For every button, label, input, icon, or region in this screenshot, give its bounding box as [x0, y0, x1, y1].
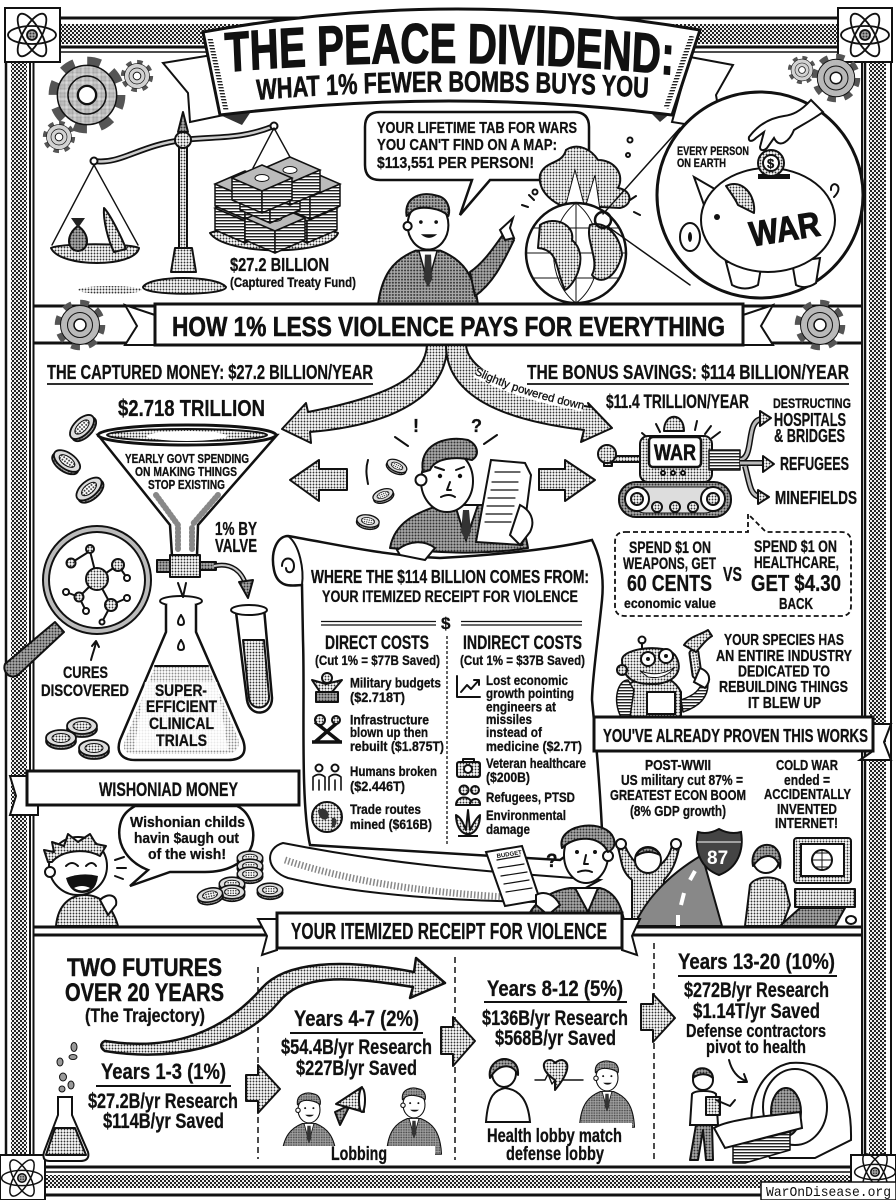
valve label — [215, 519, 257, 556]
worried man reading receipt — [366, 416, 532, 560]
coin dropping in: $ — [767, 156, 775, 171]
column: direct costs: (Cut 1% = $77B Saved) — [315, 652, 440, 668]
item: lost growth — [457, 672, 582, 754]
money label — [230, 255, 356, 290]
timeline stage: years 8-12 — [482, 976, 634, 1165]
pointer lines to inset — [603, 128, 690, 285]
piggy bank — [680, 168, 838, 288]
coin pile — [196, 851, 283, 907]
column: direct costs: DIRECT COSTS — [325, 633, 429, 654]
title banner — [161, 8, 734, 125]
money label: $27.2 BILLION — [230, 255, 329, 275]
timeline stage: years 4-7 — [280, 1006, 442, 1165]
robot statement: REBUILDING THINGS — [719, 679, 848, 696]
healthcare side: BACK — [779, 596, 813, 613]
heading: two futures: OVER 20 YEARS — [65, 979, 224, 1007]
exploding globe — [522, 138, 640, 303]
receipt held — [476, 460, 532, 545]
piggy bank: WAR — [747, 205, 823, 254]
post-wwii block — [610, 758, 746, 820]
speech bubble: wishonian childs — [119, 806, 253, 886]
test tube — [231, 605, 272, 713]
robot statement: IT BLEW UP — [748, 695, 821, 712]
hand — [749, 100, 823, 150]
funnel label: STOP EXISTING — [148, 477, 225, 492]
every person label: EVERY PERSON — [677, 144, 749, 158]
post-wwii block: GREATEST ECON BOOM — [610, 788, 746, 804]
figure: 2.718 trillion: $2.718 TRILLION — [118, 395, 265, 421]
timeline stage: years 8-12: $568B/yr Saved — [495, 1027, 616, 1050]
cures discovered label: DISCOVERED — [41, 681, 129, 700]
main title: THE PEACE DIVIDEND: — [224, 23, 672, 76]
cheering man — [616, 839, 681, 926]
item: lost growth: instead of — [486, 724, 542, 740]
scroll bottom roll — [270, 843, 600, 902]
gears top right — [790, 57, 857, 99]
arrow: bonus savings right — [445, 346, 613, 443]
item: lost growth: engineers at — [486, 698, 556, 714]
highway with 87 shield — [634, 829, 742, 926]
coin dropping in — [758, 150, 784, 176]
small receipt: BUDGET — [496, 850, 523, 860]
item: lost growth: Lost economic — [486, 672, 568, 688]
swooping trajectory arrow — [101, 958, 445, 1055]
cures discovered label — [41, 641, 129, 700]
item: veteran healthcare — [457, 755, 586, 785]
flying coins near man — [355, 456, 409, 531]
speech bubble: lifetime tab: YOUR LIFETIME TAB FOR WARS — [377, 120, 577, 137]
heading: two futures: TWO FUTURES — [67, 954, 222, 982]
MRI scanner — [714, 1063, 851, 1163]
item: military budgets — [312, 673, 441, 705]
heading: two futures: (The Trajectory) — [85, 1006, 205, 1027]
funnel label — [125, 451, 249, 492]
banner: wishoniad money: WISHONIAD MONEY — [99, 780, 238, 801]
healthcare side: HEALTHCARE, — [754, 553, 839, 572]
banner: itemized receipt for violence — [258, 913, 640, 955]
weapons side: WEAPONS, GET — [623, 554, 716, 573]
corner atom bottom right — [851, 1151, 896, 1200]
destruction labels — [773, 395, 857, 508]
weapons side: economic value — [624, 595, 716, 611]
post-wwii block: POST-WWII — [645, 758, 711, 774]
flask of clinical trials — [119, 583, 245, 760]
technician — [690, 1068, 735, 1160]
every person label — [677, 144, 749, 170]
timeline stage: years 4-7: Years 4-7 (2%) — [294, 1006, 419, 1031]
timeline stage: years 13-20: Years 13-20 (10%) — [678, 949, 835, 974]
timeline dividers — [258, 943, 654, 1160]
corner atom bottom left — [0, 1155, 45, 1200]
timeline stage: years 13-20: pivot to health — [706, 1037, 806, 1057]
weapons side: 60 CENTS — [627, 570, 712, 596]
heading: two futures — [65, 954, 224, 1027]
healthcare side: SPEND $1 ON — [754, 537, 837, 556]
item: veteran healthcare: ($200B) — [486, 769, 530, 785]
item: refugees — [456, 786, 575, 805]
timeline stage: years 4-7: Lobbing — [331, 1144, 387, 1165]
flask label: TRIALS — [156, 731, 207, 750]
scroll receipt — [270, 536, 603, 902]
item: lost growth: medicine ($2.7T) — [486, 738, 582, 754]
presenter pointing at globe — [377, 194, 514, 317]
money stack — [215, 157, 340, 253]
every person label: ON EARTH — [677, 156, 726, 170]
valve label: 1% BY — [215, 519, 257, 539]
speech bubble: lifetime tab: $113,551 PER PERSON! — [377, 155, 534, 172]
arrow to stage 2 — [246, 1065, 280, 1113]
column: indirect costs: (Cut 1% = $37B Saved) — [460, 652, 585, 668]
destruction labels: REFUGEES — [780, 454, 849, 474]
magnifying glass with molecule — [4, 529, 148, 677]
coins around funnel — [46, 411, 109, 759]
speech bubble: wishonian childs: Wishonian childs — [130, 814, 245, 831]
right block arrow — [539, 460, 595, 501]
exclamation and question marks — [366, 416, 497, 484]
post-wwii block: (8% GDP growth) — [630, 804, 726, 820]
timeline stage: years 13-20 — [678, 949, 851, 1163]
item: refugees: Refugees, PTSD — [486, 789, 575, 805]
timeline stage: years 13-20: $272B/yr Research — [684, 979, 829, 1002]
war machine: WAR — [654, 440, 696, 465]
cold war block: ended = — [784, 773, 830, 789]
retro computer — [780, 838, 856, 926]
item: humans broken — [313, 763, 437, 794]
cold war block: ACCIDENTALLY — [764, 787, 851, 803]
man holding receipt at scroll bottom — [486, 826, 625, 926]
healthcare side — [751, 537, 841, 613]
post-wwii block: US military cut 87% = — [621, 773, 743, 789]
flask label: CLINICAL — [149, 714, 214, 733]
interstate 87 shield: 87 — [707, 848, 728, 869]
gears beside section banner — [58, 303, 842, 347]
flask label: SUPER- — [155, 681, 207, 700]
inset circle: piggy bank — [657, 92, 863, 298]
speech bubble: wishonian childs: havin $augh out — [134, 830, 239, 847]
destruction labels: MINEFIELDS — [775, 488, 857, 508]
item: infrastructure: blown up then — [350, 724, 428, 740]
corner atom top left — [5, 8, 60, 62]
robot statement — [716, 632, 852, 712]
robot statement: AN ENTIRE INDUSTRY — [716, 648, 852, 665]
item: trade routes — [312, 801, 432, 832]
small flask with bubbles — [43, 1042, 88, 1161]
left block arrow — [290, 460, 347, 501]
item: humans broken: ($2.446T) — [350, 778, 405, 794]
item: military budgets: ($2.718T) — [350, 689, 405, 705]
balance scale with bombs versus money — [51, 112, 340, 294]
arrow: captured money left — [282, 345, 447, 443]
timeline stage: years 8-12: Years 8-12 (5%) — [487, 976, 623, 1001]
column: indirect costs: INDIRECT COSTS — [463, 633, 582, 654]
healthcare side: GET $4.30 — [751, 570, 841, 596]
speech bubble: lifetime tab — [365, 112, 589, 215]
figure: 11.4 trillion: $11.4 TRILLION/YEAR — [606, 392, 749, 413]
cold war block: COLD WAR — [776, 758, 838, 774]
item: infrastructure: Infrastructure — [350, 712, 429, 728]
destruction labels: DESTRUCTING — [773, 395, 851, 411]
speech bubble: lifetime tab: YOU CAN'T FIND ON A MAP: — [377, 137, 557, 154]
scroll heading: YOUR ITEMIZED RECEIPT FOR VIOLENCE — [322, 587, 578, 606]
timeline stage: years 13-20: $1.14T/yr Saved — [693, 1000, 820, 1023]
flask label — [146, 681, 217, 750]
item: environmental damage — [456, 807, 566, 837]
funnel with valve — [98, 425, 277, 598]
item: military budgets: Military budgets — [350, 674, 441, 690]
cold war block — [764, 758, 851, 832]
corner atom top right — [838, 8, 892, 62]
robot with hammer — [617, 630, 712, 717]
scroll heading: WHERE THE $114 BILLION COMES FROM: — [311, 567, 589, 587]
weapons side: SPEND $1 ON — [629, 538, 711, 557]
cures discovered label: CURES — [63, 663, 108, 682]
woman — [745, 845, 790, 926]
versus: VS — [723, 564, 742, 586]
heading: captured money: THE CAPTURED MONEY: $27.2 BILLION/YEAR — [47, 362, 373, 384]
arrow to scanner — [729, 1060, 747, 1082]
divider with dollar — [321, 614, 582, 845]
timeline stage: years 4-7: $54.4B/yr Research — [281, 1036, 432, 1059]
item: trade routes: Trade routes — [350, 801, 421, 817]
item: veteran healthcare: Veteran healthcare — [486, 755, 586, 771]
banner: wishoniad money — [10, 771, 299, 815]
item: environmental damage: Environmental — [486, 807, 566, 823]
subtitle: WHAT 1% FEWER BOMBS BUYS YOU — [256, 71, 648, 100]
war machine — [598, 411, 774, 517]
molecule — [63, 545, 130, 624]
timeline stage: years 8-12: $136B/yr Research — [482, 1007, 628, 1030]
timeline stage: years 8-12: defense lobby — [506, 1144, 604, 1165]
doctor, heart and lobbyist — [486, 1059, 634, 1131]
arrow to stage 3 — [441, 1017, 475, 1066]
section banner: how 1% less violence pays — [125, 304, 773, 345]
gears top left — [45, 62, 151, 151]
item: environmental damage: damage — [486, 821, 530, 837]
item: humans broken: Humans broken — [350, 763, 437, 779]
robot statement: DEDICATED TO — [738, 664, 830, 680]
banner: itemized receipt for violence: YOUR ITEMIZED RECEIPT FOR VIOLENCE — [291, 918, 607, 944]
timeline stage: years 1-3: $114B/yr Saved — [103, 1110, 224, 1133]
speech bubble: wishonian childs: of the wish! — [148, 846, 226, 863]
valve label: VALVE — [215, 536, 257, 556]
comparison callout: weapons vs healthcare — [615, 514, 851, 616]
bomb and missile in pan — [69, 208, 126, 252]
money label: (Captured Treaty Fund) — [230, 274, 356, 290]
arrow to stage 4 — [641, 994, 675, 1042]
funnel label: YEARLY GOVT SPENDING — [125, 451, 249, 466]
item: lost growth: missiles — [486, 711, 532, 727]
exclamation and question marks: ! — [413, 416, 419, 436]
timeline stage: years 1-3: Years 1-3 (1%) — [101, 1059, 226, 1084]
flask label: EFFICIENT — [146, 697, 217, 716]
output arrows — [740, 411, 774, 504]
column: direct costs — [312, 633, 444, 832]
robot statement: YOUR SPECIES HAS — [724, 632, 844, 649]
timeline stage: years 4-7: $227B/yr Saved — [296, 1057, 417, 1080]
laughing child — [44, 834, 126, 926]
item: infrastructure: rebuilt ($1.875T) — [350, 738, 444, 754]
item: infrastructure — [312, 712, 444, 754]
weapons side — [623, 538, 716, 611]
cold war block: INVENTED — [777, 802, 837, 818]
arrow: bonus savings right: Slightly powered down — [475, 368, 584, 410]
section banner: how 1% less violence pays: HOW 1% LESS VIOLENCE PAYS FOR EVERYTHING — [172, 311, 725, 342]
funnel label: ON MAKING THINGS — [135, 464, 237, 479]
timeline stage: years 8-12: Health lobby match — [487, 1126, 622, 1147]
exclamation and question marks: ? — [471, 416, 482, 436]
item: trade routes: mined ($616B) — [350, 816, 432, 832]
timeline stage: years 1-3 — [88, 1059, 238, 1133]
column: indirect costs — [456, 633, 586, 837]
question mark: ? — [546, 851, 558, 872]
cold war block: INTERNET! — [775, 816, 838, 832]
scroll heading — [311, 567, 589, 606]
item: lost growth: growth pointing — [486, 685, 574, 701]
lobbyists — [280, 1087, 442, 1162]
divider with dollar: $ — [441, 614, 451, 633]
destruction labels: HOSPITALS — [774, 410, 846, 430]
timeline stage: years 1-3: $27.2B/yr Research — [88, 1090, 238, 1113]
timeline stage: years 13-20: Defense contractors — [686, 1021, 826, 1041]
destruction labels: & BRIDGES — [774, 426, 845, 446]
banner: proven this works — [594, 717, 891, 760]
